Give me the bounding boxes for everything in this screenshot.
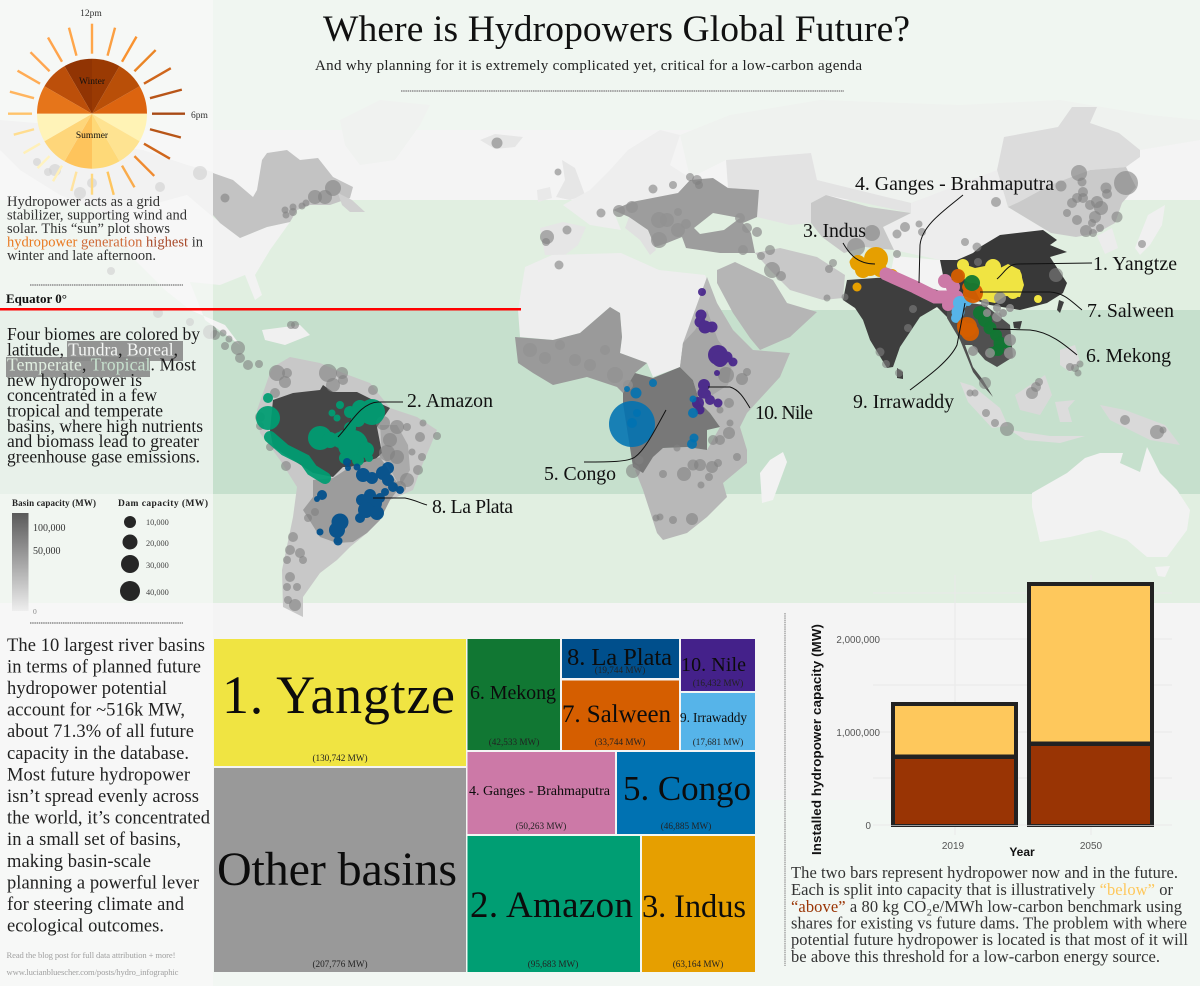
text: biomes [6,324,203,466]
axis labels: 2050 [1080,841,1103,852]
basin dams: Irrawaddy [951,296,972,323]
tile: La Plata [562,639,679,678]
text: biomes: basins, where high nutrients [7,416,203,436]
map labels: 8. La Plata [432,496,513,518]
tile: Indus [642,836,755,972]
tile: Irrawaddy [680,693,755,750]
tile: Yangtze: 1. Yangtze [222,665,455,725]
basin dams: Ganges - Brahmaputra [886,274,962,311]
bar: 2019 [891,702,1018,827]
text: bar chart explanation: Each is split into capacity that is illustratively “below” or [791,880,1174,899]
tile: Mekong [468,639,560,750]
axis labels: Installed hydropower capacity (MW) [809,624,824,855]
basin dams: La Plata [314,458,404,546]
map labels: 2. Amazon [407,390,493,412]
tile: Mekong: 6. Mekong [470,682,556,704]
tile: Irrawaddy: 9. Irrawaddy [680,710,747,725]
legend: dam capacity: 40,000 [146,588,169,597]
text: sun explanation: Hydropower acts as a grid [7,194,161,210]
text: largest basins: capacity in the database. [7,744,189,764]
text: biomes: Four biomes are colored by [7,324,200,344]
text: sun explanation: solar. This “sun” plot shows [7,221,170,237]
tile: Congo [617,752,755,834]
map labels: 7. Salween [1087,300,1174,322]
map labels: 9. Irrawaddy [853,391,954,413]
tile: Other basins [214,768,466,972]
text: largest basins: about 71.3% of all future [7,722,194,742]
tile: Nile [681,639,755,691]
tile: Mekong: (42,533 MW) [489,737,539,747]
tile: Ganges - Brahmaputra: 4. Ganges - Brahmaputra [469,783,611,799]
text: bar chart explanation: “above” a 80 kg CO₂e/MWh low-carbon benchmark using [791,897,1182,916]
tile: Amazon [468,836,640,972]
map labels: 1. Yangtze [1093,253,1177,275]
text: largest basins: the world, it’s concentrated [7,809,211,829]
text: largest basins: planning a powerful lever [7,874,199,894]
text: largest basins: for steering climate and [7,895,185,915]
text: sun explanation: hydropower generation highest in [7,234,204,250]
tile: Congo: (46,885 MW) [661,821,711,831]
tile: Irrawaddy: (17,681 MW) [693,737,743,747]
legend: dam capacity: Dam capacity (MW) [118,498,208,509]
legend: dam capacity: 30,000 [146,561,169,570]
sun wedges [37,59,147,169]
tile: Yangtze: (130,742 MW) [312,753,368,763]
text: bar chart explanation: be above this threshold for a low-carbon energy source. [791,947,1160,966]
tile: Nile: (16,432 MW) [693,678,743,688]
tile: Ganges - Brahmaputra [468,752,615,834]
text: sun explanation [7,194,204,264]
tile: Amazon: (95,683 MW) [528,959,578,969]
tile: Amazon: 2. Amazon [470,885,633,926]
map labels: 3. Indus [803,220,866,242]
land: light base continents [0,100,1200,617]
bar chart [809,575,1172,859]
text: largest basins: ecological outcomes. [7,917,164,937]
sun plot: Summer [76,131,109,141]
sun plot [8,9,208,195]
map labels: 10. Nile [755,402,813,424]
chart grid [873,575,1172,835]
attribution: Read the blog post for full data attribution + more! [6,950,176,960]
text: largest basins: making basin-scale [7,852,151,872]
legend: basin capacity [12,498,96,616]
tile: Salween: 7. Salween [562,701,672,728]
legend: basin capacity: Basin capacity (MW) [12,498,96,508]
tile: Salween: (33,744 MW) [595,737,645,747]
legend: dam capacity: 10,000 [146,518,169,527]
map labels [407,173,1177,518]
text: biomes: Temperate, Tropical. Most [7,355,196,375]
grey dams over South-East Asia [968,292,1016,359]
basin dams: Indus [850,247,898,292]
land: highlighted dark basins [213,150,1067,543]
text: biomes: new hydropower is [7,370,142,390]
sun rays [8,24,185,195]
basin dams: Amazon [256,393,385,483]
axis labels: 2019 [942,841,965,852]
text: largest basins: isn’t spread evenly across [7,787,199,807]
tile: Yangtze [214,639,466,766]
sun plot: Winter [79,77,106,87]
axis labels: 1,000,000 [836,728,881,739]
title: Where is Hydropowers Global Future? [323,9,910,50]
bar: 2050 [1027,582,1154,827]
text: biomes: greenhouse gase emissions. [7,446,200,466]
text: largest basins: in a small set of basins, [7,830,181,850]
dams on mid-grey basins: Danube, Anatolia and Niger [523,201,765,390]
tile: Other basins: Other basins [217,843,457,896]
tile: Ganges - Brahmaputra: (50,263 MW) [516,821,566,831]
world map [0,100,1200,617]
map labels: 6. Mekong [1086,345,1171,367]
basin dams: Mekong [964,275,1011,357]
map labels: 5. Congo [544,463,616,485]
sun plot: 6pm [191,111,208,121]
equator label: Equator 0° [6,291,67,306]
text: biomes: concentrated in a few [7,385,157,405]
tile: Congo: 5. Congo [623,769,751,808]
text: largest basins: The 10 largest river basins [7,636,205,656]
basin dams: Salween [951,269,983,341]
axis labels [809,624,1103,859]
tile: Nile: 10. Nile [681,654,746,676]
tile: Indus: 3. Indus [642,889,746,925]
legend: basin capacity: 100,000 [33,523,66,534]
tile: Indus: (63,164 MW) [673,959,723,969]
text: largest basins: Most future hydropower [7,766,190,786]
sun plot: 12pm [80,9,102,19]
text: largest basins: hydropower potential [7,679,167,699]
legend: dam capacity [118,498,208,601]
tile: Salween [562,680,679,750]
tile: La Plata: 8. La Plata [567,644,672,671]
text: sun explanation: stabilizer, supporting wind and [7,208,188,224]
attribution: www.lucianbluescher.com/posts/hydro_infographic [6,967,179,977]
legend: basin capacity: 50,000 [33,546,60,557]
text: largest basins [7,636,211,937]
tile: La Plata: (19,744 MW) [595,665,645,675]
text: bar chart explanation: The two bars represent hydropower now and in the future. [791,863,1178,882]
legend: dam capacity: 20,000 [146,539,169,548]
basin dams: Yangtze [957,259,1042,303]
text: largest basins: account for ~516k MW, [7,701,185,721]
text: bar chart explanation [791,863,1188,966]
left panel overlay [0,0,213,986]
map labels: 4. Ganges - Brahmaputra [855,173,1054,195]
text: biomes: tropical and temperate [7,400,163,420]
axis labels: 2,000,000 [836,635,881,646]
text: biomes: and biomass lead to greater [7,431,199,451]
axis labels: Year [1009,845,1035,859]
text: sun explanation: winter and late afternoon. [7,248,156,264]
leader lines [338,195,1092,505]
other dams: grey circles [33,138,1166,611]
tile: Other basins: (207,776 MW) [312,959,368,969]
axis labels: 0 [866,821,872,832]
subtitle: And why planning for it is extremely complicated yet, critical for a low-carbon agenda [315,58,862,74]
basin dams: Nile [692,288,738,414]
equator line [0,308,521,310]
attribution [6,950,179,977]
basin dams: Congo [609,379,698,449]
text: bar chart explanation: shares for existing vs future dams. The problem with where [791,914,1187,932]
treemap [214,639,755,972]
text: bar chart explanation: potential future hydropower is located is that most of it will [791,930,1188,949]
text: biomes: latitude, Tundra, Boreal, [7,339,178,359]
legend: basin capacity: 0 [33,607,37,616]
text: largest basins: in terms of planned future [7,658,201,678]
